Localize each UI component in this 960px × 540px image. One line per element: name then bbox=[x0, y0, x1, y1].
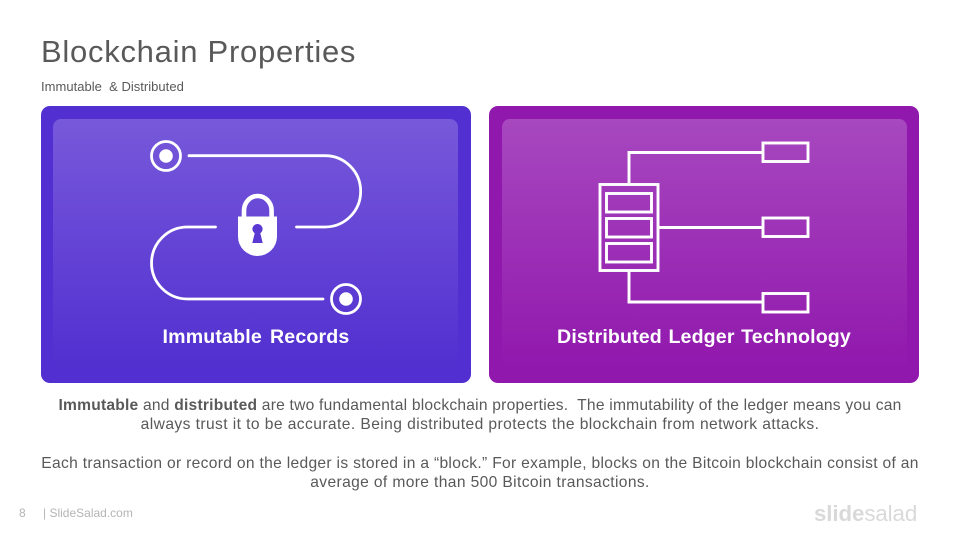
logo wordmark: slidesalad bbox=[814, 501, 917, 526]
connectors bbox=[629, 152, 763, 302]
subtitle: Immutable & Distributed bbox=[41, 79, 184, 94]
panel caption: Distributed Ledger Technology bbox=[557, 326, 851, 348]
body text bbox=[41, 397, 919, 491]
panel highlight bbox=[53, 119, 458, 369]
icon: lock on a winding path bbox=[150, 140, 362, 315]
paragraph 2: Each transaction or record on the ledger is stored in a “block.” For example, blocks on the Bitcoin blockchain consist of an bbox=[41, 455, 919, 472]
page number: 8 bbox=[19, 506, 26, 520]
panel: immutable records bbox=[41, 106, 471, 383]
start node bbox=[152, 142, 180, 170]
panel caption: Immutable Records bbox=[163, 326, 349, 348]
title: Blockchain Properties bbox=[41, 34, 356, 69]
paragraph 2: average of more than 500 Bitcoin transactions. bbox=[310, 474, 650, 491]
icon: distributed ledger diagram bbox=[598, 142, 810, 314]
node blocks bbox=[763, 143, 808, 312]
end node bbox=[332, 284, 360, 314]
padlock bbox=[238, 196, 277, 256]
central ledger bbox=[600, 184, 658, 270]
paragraph 1: always trust it to be accurate. Being distributed protects the blockchain from network attacks. bbox=[141, 416, 819, 433]
paragraph 2 bbox=[41, 455, 919, 491]
footer text: | SlideSalad.com bbox=[43, 506, 133, 520]
panel: distributed ledger technology bbox=[489, 106, 919, 383]
winding path bbox=[152, 156, 361, 299]
paragraph 1: Immutable and distributed are two fundamental blockchain properties. The immutability of the ledger means you can bbox=[58, 397, 902, 414]
paragraph 1 bbox=[58, 397, 902, 433]
panel highlight bbox=[502, 119, 907, 369]
